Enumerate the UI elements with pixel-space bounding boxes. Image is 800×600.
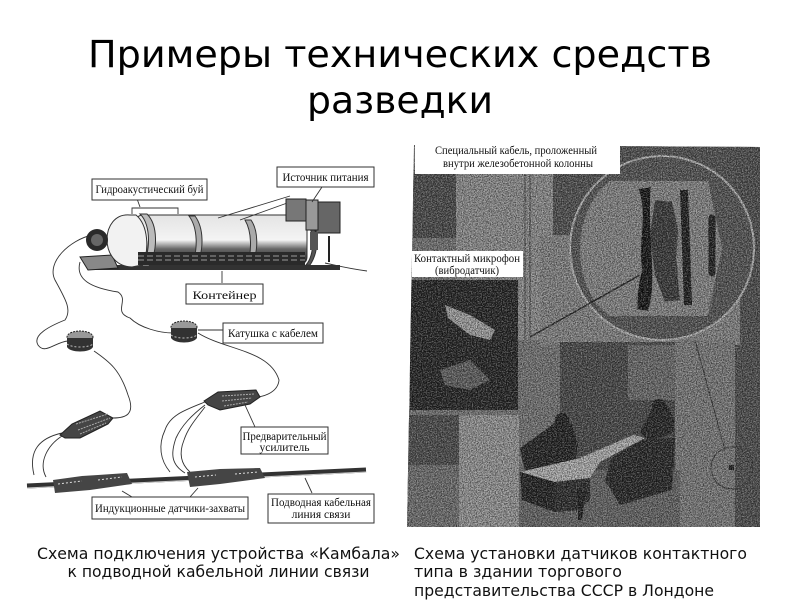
label: cable reel: Катушка с кабелем xyxy=(228,328,319,340)
label: undersea cable xyxy=(268,494,374,523)
caption: left xyxy=(37,544,400,581)
label: undersea cable: линия связи xyxy=(292,509,350,521)
icon: container cylinder xyxy=(80,196,340,270)
label: induction sensors: Индукционные датчики-захваты xyxy=(95,503,245,515)
label: undersea cable: Подводная кабельная xyxy=(271,497,372,509)
label: cable reel xyxy=(223,323,323,343)
caption: right: представительства СССР в Лондоне xyxy=(414,581,714,600)
leader lines xyxy=(122,187,322,497)
icon: preamplifiers xyxy=(60,390,260,438)
label: hydroacoustic buoy: Гидроакустический буй xyxy=(96,184,204,196)
diagram: Kambala device xyxy=(27,167,374,523)
caption: left: к подводной кабельной линии связи xyxy=(68,562,370,581)
label: power source xyxy=(277,167,374,187)
caption: left: Схема подключения устройства «Камбала» xyxy=(37,544,400,563)
label: contact microphone: Контактный микрофон xyxy=(414,253,520,265)
label: preamplifier: усилитель xyxy=(259,442,310,454)
sensor location marker xyxy=(695,340,753,489)
caption: right: Схема установки датчиков контактного xyxy=(414,544,747,563)
caption: right: типа в здании торгового xyxy=(414,562,622,581)
seated figures at table xyxy=(520,399,675,520)
caption: right xyxy=(414,544,747,600)
painting xyxy=(410,280,518,410)
label: special cable xyxy=(415,145,620,174)
title: разведки xyxy=(307,79,493,122)
label: induction sensors xyxy=(92,497,248,519)
title: Примеры технических средств xyxy=(88,33,712,76)
icon: undersea cable with sensors xyxy=(27,468,366,493)
label: power source: Источник питания xyxy=(282,172,369,184)
label: special cable: Специальный кабель, проложенный xyxy=(435,145,597,157)
label: container: Контейнер xyxy=(192,290,257,302)
title xyxy=(88,33,712,122)
label: preamplifier: Предварительный xyxy=(242,431,326,443)
icon: cable reels xyxy=(67,321,197,352)
label: container xyxy=(186,284,263,304)
cables xyxy=(32,235,367,477)
label: hydroacoustic buoy xyxy=(92,179,207,200)
photo: contact sensors in trade mission building xyxy=(407,145,760,527)
label: contact microphone xyxy=(412,251,523,277)
magnified circle xyxy=(530,156,754,340)
label: special cable: внутри железобетонной колонны xyxy=(443,158,593,170)
label: preamplifier xyxy=(241,427,328,454)
label: contact microphone: (вибродатчик) xyxy=(435,265,499,277)
